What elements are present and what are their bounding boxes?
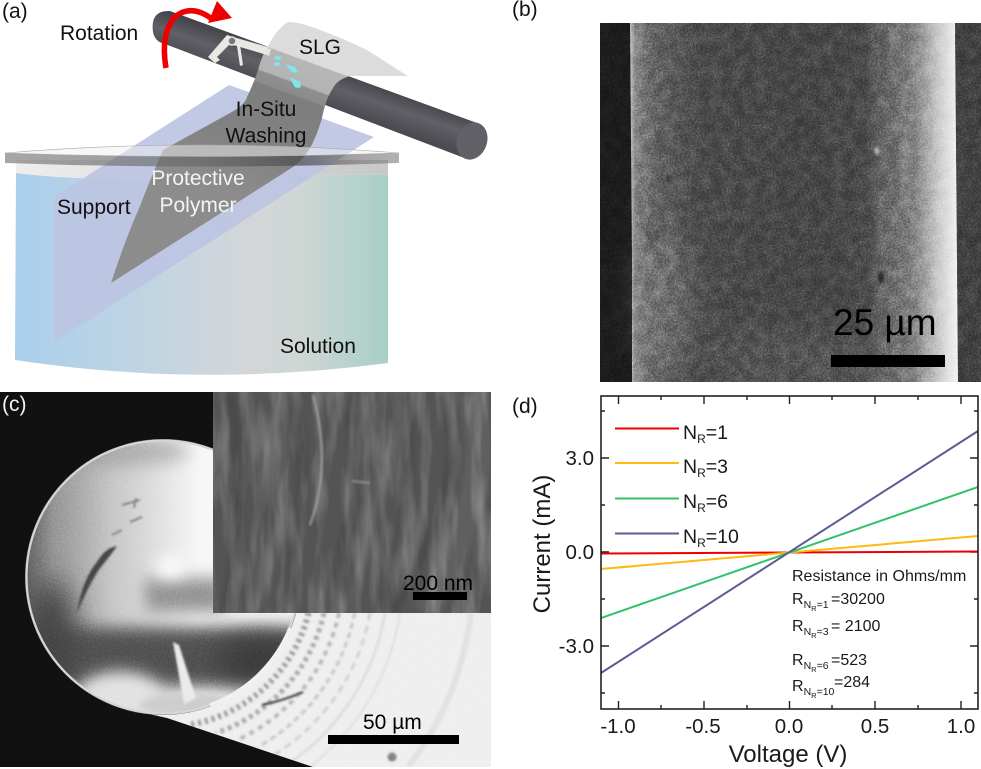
panel label c: (c) bbox=[2, 393, 26, 416]
panel d: current-voltage chart bbox=[529, 396, 978, 768]
legend NR=10: =10 bbox=[706, 526, 739, 548]
surface noise bbox=[600, 23, 981, 382]
x axis title: Voltage (V) bbox=[729, 741, 847, 768]
resistance annotation: N bbox=[804, 599, 811, 611]
legend NR=3: R bbox=[697, 466, 706, 480]
label: in-situ washing: Washing bbox=[226, 124, 306, 148]
scale bar 200 nm bbox=[413, 592, 467, 600]
resistance annotation: =1 bbox=[817, 599, 829, 611]
resistance annotation: =6 bbox=[817, 660, 829, 672]
label: in-situ washing: In-Situ bbox=[236, 98, 296, 121]
fiber body bbox=[630, 23, 958, 382]
dark background left bbox=[600, 23, 632, 382]
legend NR=6: R bbox=[697, 501, 706, 515]
resistance annotation: N bbox=[804, 660, 811, 672]
y axis title: Current (mA) bbox=[529, 475, 556, 613]
label: protective polymer: Protective bbox=[151, 167, 245, 190]
x tick labels: 0.0 bbox=[775, 715, 803, 738]
y tick labels: -3.0 bbox=[559, 635, 594, 658]
surface blotches bbox=[600, 23, 981, 382]
label: support: Support bbox=[57, 196, 131, 219]
y tick labels bbox=[559, 447, 594, 658]
legend NR=10: N bbox=[683, 526, 697, 548]
y tick labels: 0.0 bbox=[566, 541, 594, 564]
legend NR=1: =1 bbox=[706, 422, 728, 444]
x tick labels: 1.0 bbox=[947, 715, 975, 738]
legend NR=3 bbox=[615, 456, 728, 480]
resistance annotation bbox=[792, 568, 966, 700]
y tick labels: 3.0 bbox=[566, 447, 594, 470]
legend NR=6: N bbox=[683, 491, 697, 513]
legend NR=3: =3 bbox=[706, 456, 728, 478]
legend NR=10 bbox=[615, 526, 739, 550]
bright fiber side bbox=[140, 613, 491, 767]
scale bar 50 um bbox=[328, 735, 459, 744]
scale text 25 um: 25 µm bbox=[833, 302, 937, 343]
icon: water drops bbox=[274, 56, 301, 88]
curves bbox=[601, 431, 978, 673]
x tick labels: 0.5 bbox=[861, 715, 889, 738]
dark spot on side bbox=[388, 752, 396, 762]
resistance annotation: =10 bbox=[817, 686, 835, 698]
panel a: coating schematic bbox=[2, 0, 493, 375]
fiber end disc bbox=[25, 439, 296, 715]
panel c: SEM image of fiber end bbox=[0, 392, 491, 767]
curve: NR=3 bbox=[601, 536, 978, 569]
label: protective polymer: Polymer bbox=[159, 194, 237, 217]
dark background right bbox=[955, 23, 981, 382]
panel label a: (a) bbox=[2, 0, 28, 23]
black background bbox=[0, 392, 313, 767]
resistance annotation: R bbox=[792, 678, 804, 695]
inset SEM image bbox=[213, 392, 491, 613]
fiber shading bbox=[622, 234, 868, 382]
legend NR=6 bbox=[615, 491, 728, 515]
resistance annotation: R bbox=[811, 665, 817, 674]
label: SLG: SLG bbox=[299, 36, 341, 59]
fiber surface marks bbox=[646, 115, 884, 365]
rotation arrow bbox=[164, 1, 232, 68]
rotating rod bbox=[153, 11, 493, 164]
legend NR=1 bbox=[615, 422, 728, 446]
resistance annotation: =30200 bbox=[831, 591, 885, 608]
scale text 50 um: 50 µm bbox=[363, 711, 422, 734]
resistance annotation: R bbox=[811, 631, 817, 640]
resistance annotation: R bbox=[792, 618, 804, 635]
resistance annotation: R bbox=[792, 652, 804, 669]
legend NR=6: =6 bbox=[706, 491, 728, 513]
label: rotation: Rotation bbox=[60, 22, 138, 45]
side surface noise bbox=[25, 439, 396, 766]
panel label d: (d) bbox=[512, 395, 538, 418]
legend NR=3: N bbox=[683, 456, 697, 478]
support plate bbox=[54, 85, 374, 342]
legend NR=10: R bbox=[697, 536, 706, 550]
resistance annotation: =3 bbox=[817, 626, 829, 638]
plot frame bbox=[601, 396, 978, 709]
resistance annotation: =523 bbox=[831, 652, 867, 669]
legend NR=1: N bbox=[683, 422, 697, 444]
curve: NR=1 bbox=[601, 552, 978, 554]
axis ticks bbox=[601, 396, 978, 709]
resistance annotation: R bbox=[811, 691, 817, 700]
resistance annotation: R bbox=[792, 591, 804, 608]
legend NR=1: R bbox=[697, 432, 706, 446]
protective polymer and graphene sheet bbox=[111, 22, 408, 283]
label: solution: Solution bbox=[280, 335, 356, 358]
resistance annotation: N bbox=[804, 686, 811, 698]
curve: NR=10 bbox=[601, 431, 978, 673]
scale text 200 nm: 200 nm bbox=[403, 572, 473, 595]
resistance annotation: N bbox=[804, 626, 811, 638]
icon: spray gun bbox=[208, 35, 271, 66]
x tick labels bbox=[600, 715, 975, 738]
resistance annotation: = 2100 bbox=[831, 618, 880, 635]
x tick labels: -1.0 bbox=[600, 715, 636, 738]
legend bbox=[615, 422, 739, 550]
scale bar b bbox=[831, 355, 945, 367]
resistance annotation: Resistance in Ohms/mm bbox=[792, 568, 966, 585]
panel b: SEM image of fiber bbox=[600, 23, 981, 390]
resistance annotation: =284 bbox=[834, 674, 870, 691]
curve: NR=6 bbox=[601, 487, 978, 618]
side rings bbox=[189, 613, 471, 767]
resistance annotation: R bbox=[811, 604, 817, 613]
x tick labels: -0.5 bbox=[685, 715, 721, 738]
beaker lid bbox=[5, 145, 399, 166]
solution beaker bbox=[15, 160, 388, 375]
